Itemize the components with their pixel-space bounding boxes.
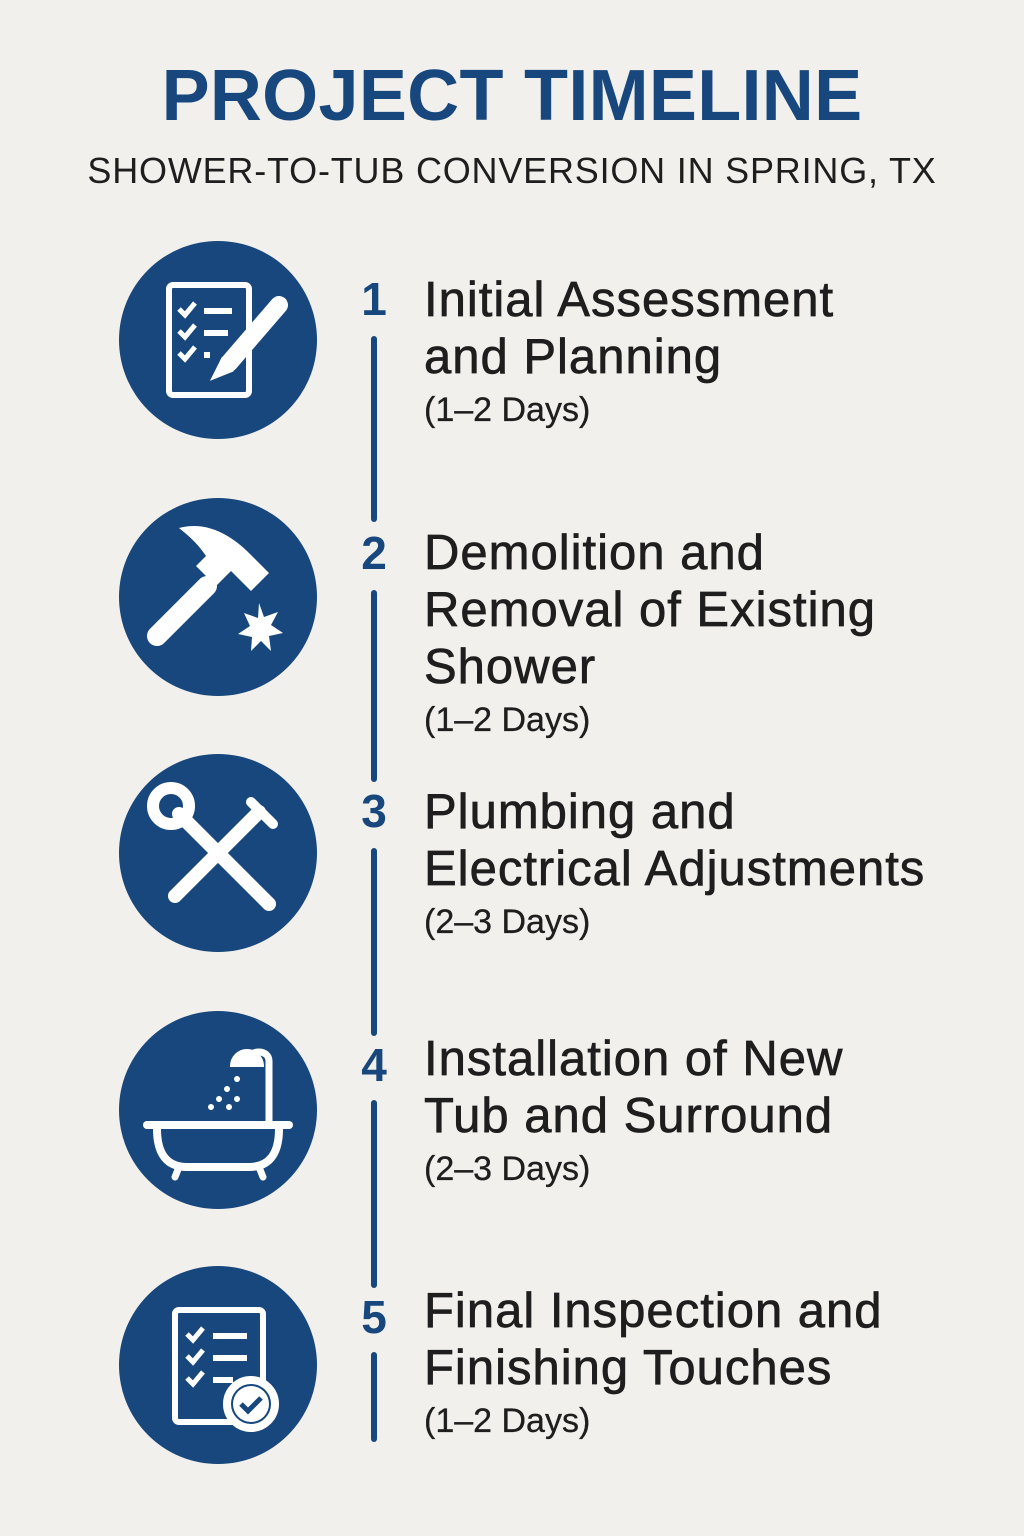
icon: hammer: [119, 498, 317, 696]
step 5 text: (1–2 Days): [424, 1402, 590, 1440]
step 4 text: (2–3 Days): [424, 1150, 590, 1188]
step 3 text: (2–3 Days): [424, 903, 590, 941]
icon: wrench and screwdriver: [119, 754, 317, 952]
step 4 text: Tub and Surround: [424, 1089, 833, 1143]
step 1 text: Initial Assessment: [424, 273, 834, 327]
step 5 text: Finishing Touches: [424, 1341, 832, 1395]
step 2 text: Shower: [424, 640, 596, 694]
subtitle: SHOWER-TO-TUB CONVERSION IN SPRING, TX: [87, 150, 937, 191]
step 3 text: [424, 785, 925, 941]
number 1: 1: [361, 273, 387, 325]
step 5 text: [424, 1284, 883, 1440]
step 2 text: [424, 526, 876, 739]
step 1 text: [424, 273, 834, 429]
step 3 text: Electrical Adjustments: [424, 842, 925, 896]
number 2: 2: [361, 527, 387, 579]
icon: bathtub with shower: [119, 1011, 317, 1209]
step 1 text: (1–2 Days): [424, 391, 590, 429]
step 2 text: Removal of Existing: [424, 583, 876, 637]
icon: checklist with check badge: [119, 1266, 317, 1464]
step 4 text: [424, 1032, 843, 1188]
step 4 text: Installation of New: [424, 1032, 843, 1086]
step 2 text: Demolition and: [424, 526, 765, 580]
number 4: 4: [361, 1039, 387, 1091]
number 3: 3: [361, 785, 387, 837]
title: PROJECT TIMELINE: [162, 56, 862, 136]
step 3 text: Plumbing and: [424, 785, 736, 839]
icon: checklist with pencil: [119, 241, 317, 439]
step 1 text: and Planning: [424, 330, 722, 384]
step 5 text: Final Inspection and: [424, 1284, 883, 1338]
number 5: 5: [361, 1291, 387, 1343]
step 2 text: (1–2 Days): [424, 701, 590, 739]
